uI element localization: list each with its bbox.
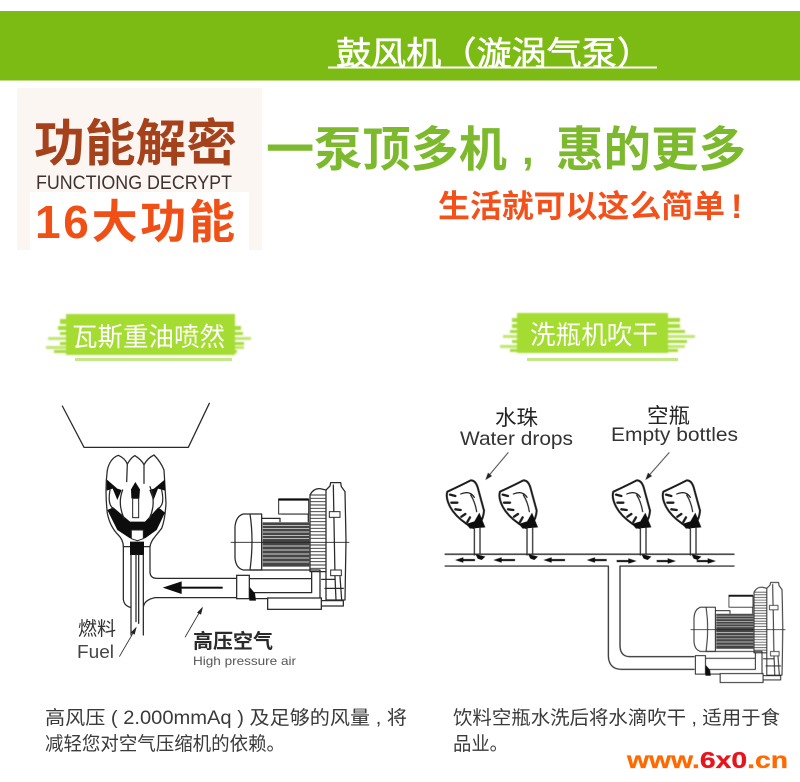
badge: bottle washer drying bbox=[500, 313, 695, 361]
flow arrows bbox=[455, 557, 716, 564]
bottles bbox=[447, 480, 701, 560]
fuel pointer bbox=[119, 627, 137, 657]
sub slogan: ! bbox=[731, 188, 742, 226]
text block: bottle description: 饮料空瓶水洗后将水滴吹干 , 适用于食 bbox=[453, 707, 780, 729]
watermark: www. 6x0 .cn bbox=[626, 747, 788, 773]
label: air en: High pressure air bbox=[193, 654, 296, 668]
text block: burner description bbox=[45, 707, 407, 755]
label: water cn: 水珠 bbox=[495, 407, 538, 430]
sub slogan: 生活就可以这么简单 bbox=[438, 188, 725, 224]
badge count: 16大功能 bbox=[35, 196, 237, 248]
diagram: burner with blower bbox=[62, 403, 349, 668]
burner flame head bbox=[106, 455, 166, 555]
badge label: 洗瓶机吹干 bbox=[530, 320, 658, 350]
label: fuel cn: 燃料 bbox=[78, 618, 116, 640]
slogan: 惠的更多 bbox=[556, 124, 746, 177]
blower unit bbox=[231, 483, 349, 609]
label: bottle cn: 空瓶 bbox=[647, 405, 690, 428]
badge: gas heavy oil burner bbox=[46, 314, 251, 361]
header band bbox=[0, 11, 800, 80]
text block: bottle description: 品业。 bbox=[453, 733, 508, 755]
text block: bottle description bbox=[453, 707, 780, 755]
badge heading: 功能解密 bbox=[34, 115, 237, 172]
badge label: 瓦斯重油喷然 bbox=[72, 322, 225, 352]
label: bottle en: Empty bottles bbox=[611, 424, 738, 446]
label: air cn: 高压空气 bbox=[193, 629, 273, 653]
burner pipes bbox=[123, 547, 237, 635]
air flow arrow bbox=[163, 581, 223, 594]
badge subtitle: FUNCTIONG DECRYPT bbox=[36, 173, 232, 194]
label: fuel en: Fuel bbox=[77, 641, 114, 662]
slogan: 一泵顶多机 bbox=[266, 124, 507, 177]
text block: burner description: 减轻您对空气压缩机的依赖。 bbox=[45, 733, 285, 755]
slogan: , bbox=[522, 126, 534, 173]
header title: 鼓风机（漩涡气泵） bbox=[336, 35, 652, 72]
slogan bbox=[266, 124, 746, 177]
text block: burner description: 高风压 ( 2.000mmAq ) 及足够的风量 , 将 bbox=[45, 707, 407, 729]
blower unit bbox=[691, 582, 785, 683]
air rail bbox=[445, 554, 734, 669]
furnace funnel bbox=[62, 403, 209, 447]
label: water en: Water drops bbox=[460, 428, 573, 450]
bottle pointer bbox=[645, 452, 669, 480]
panel: function decrypt badge bbox=[17, 88, 262, 250]
diagram: bottle drying with blower bbox=[445, 405, 785, 683]
air pointer bbox=[185, 607, 203, 637]
water pointer bbox=[485, 452, 508, 480]
